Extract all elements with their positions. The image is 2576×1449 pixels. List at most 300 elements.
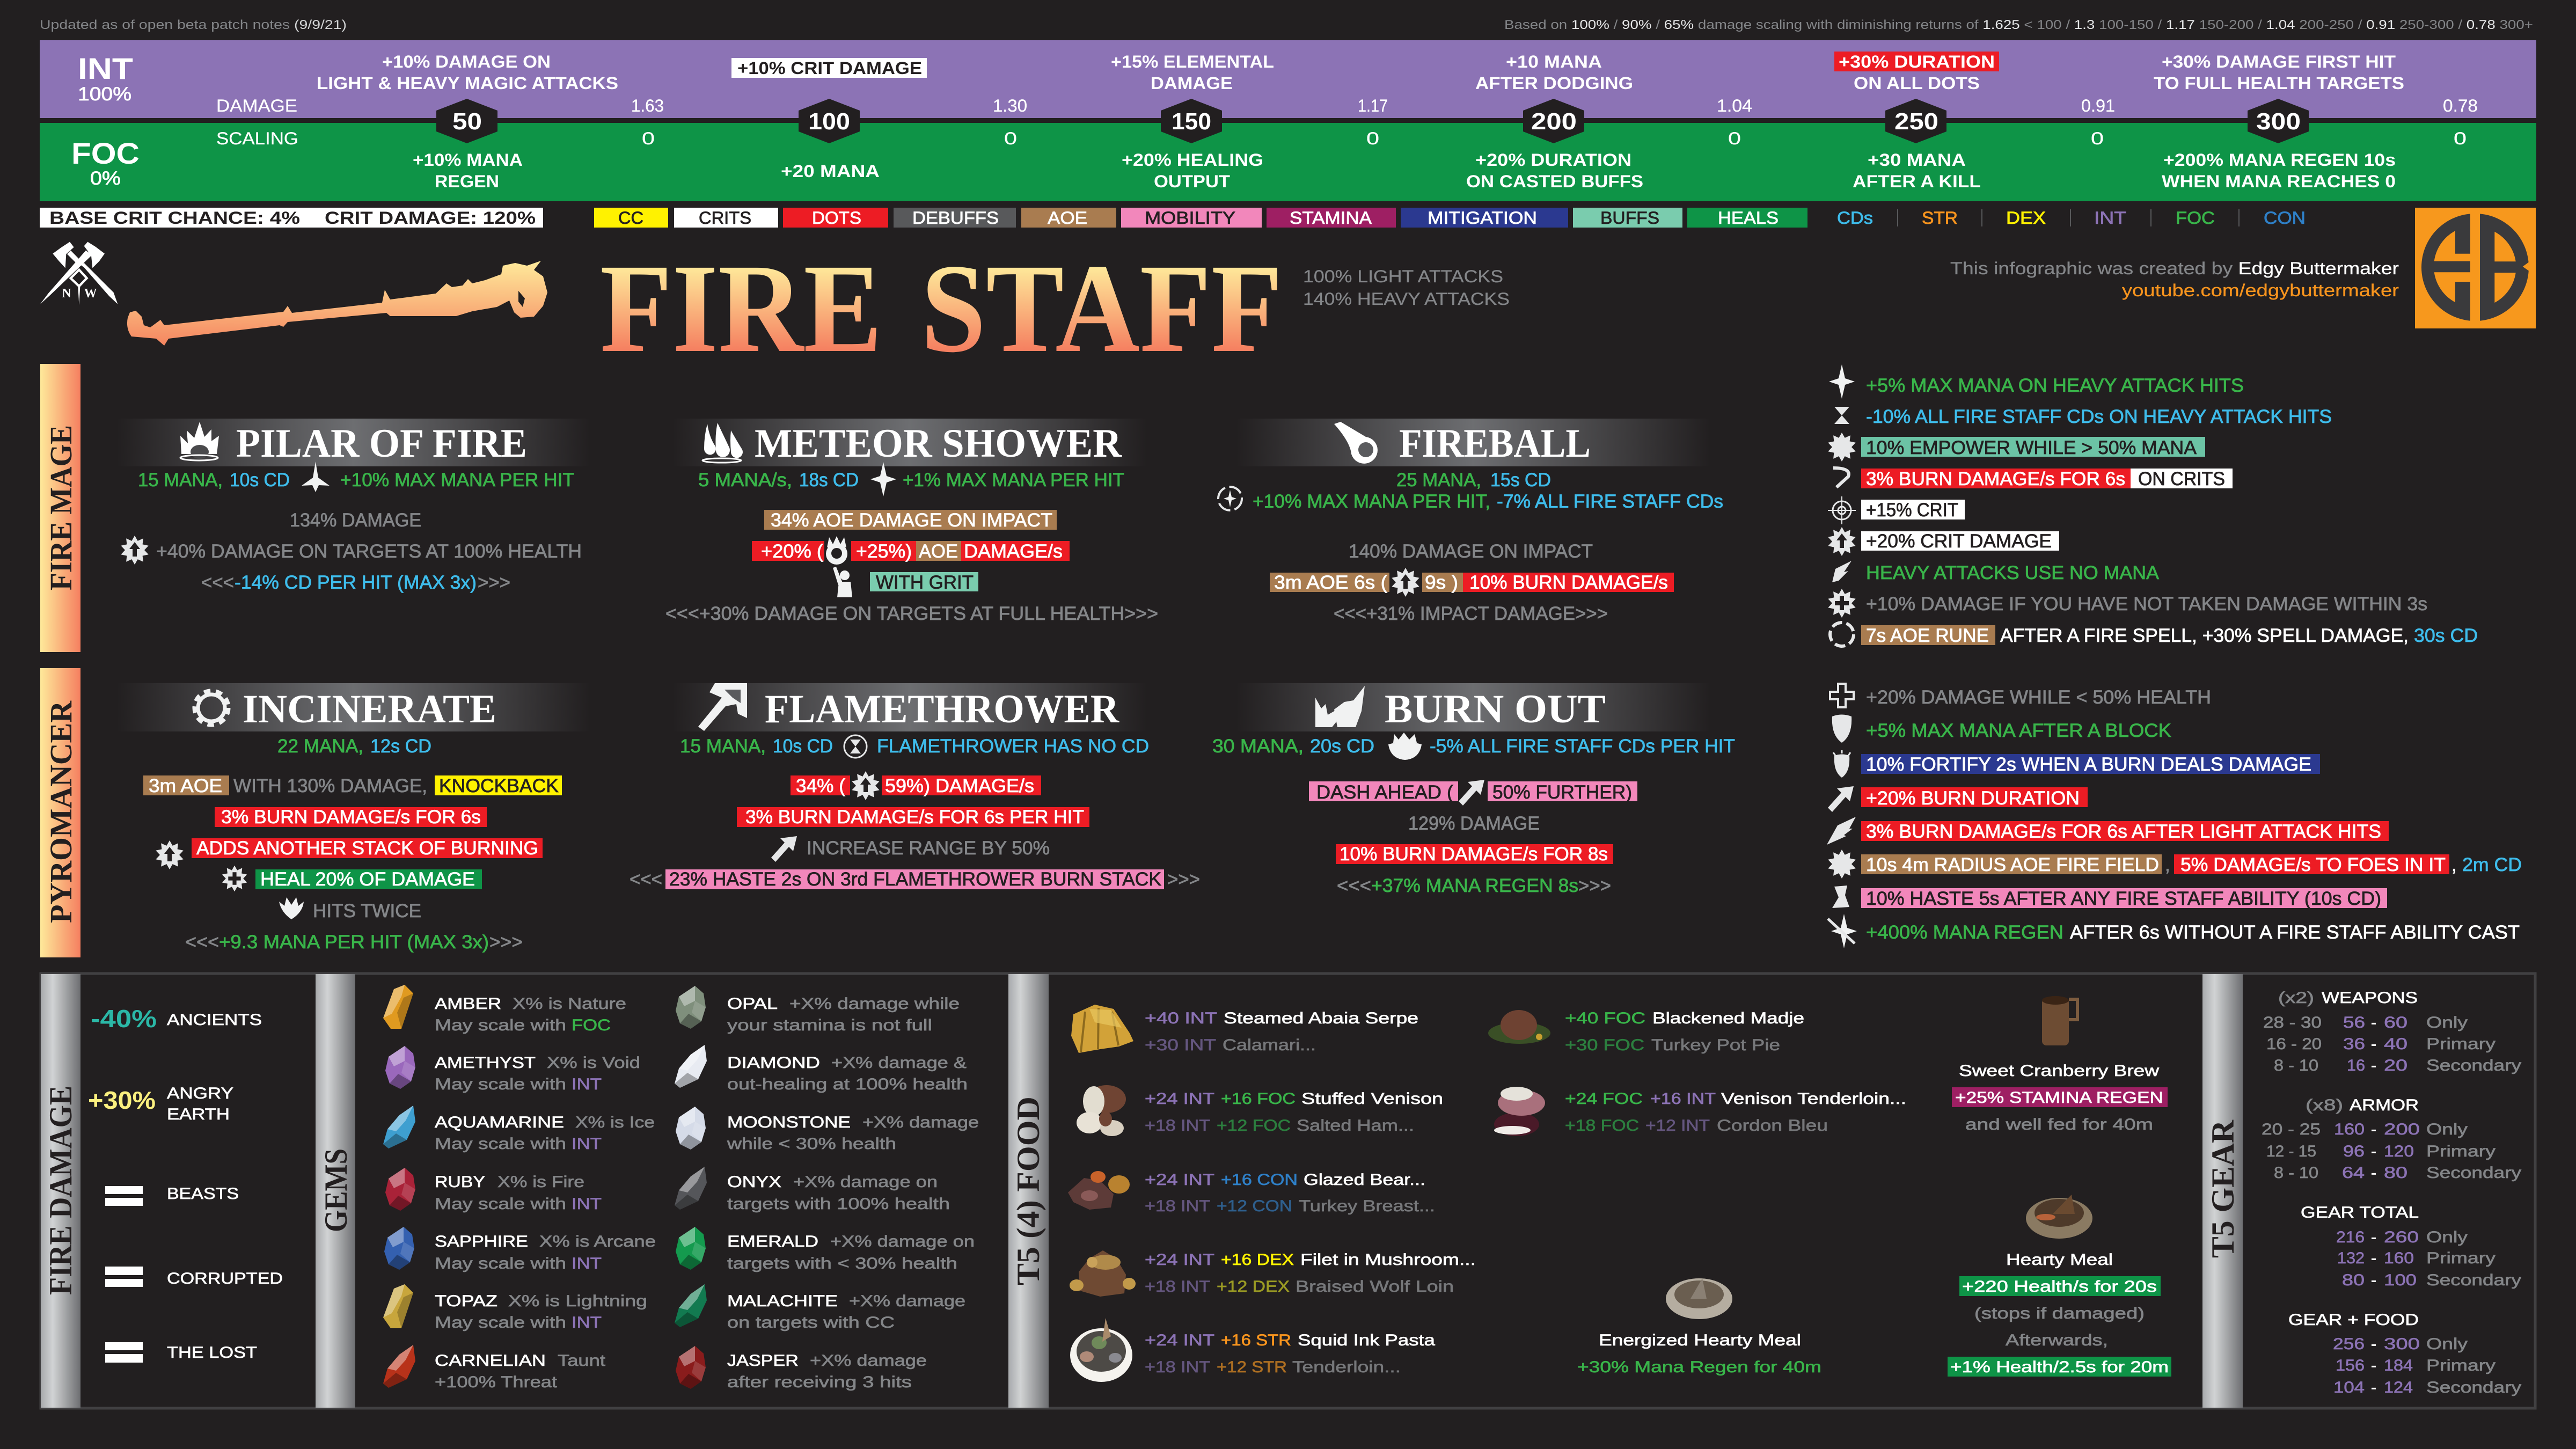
gem: onyx: [675, 1167, 950, 1213]
attack multipliers: 140% HEAVY ATTACKS: [1303, 289, 1510, 309]
passive: damage untouched: +10% DAMAGE IF YOU HAVE NOT TAKEN DAMAGE WITHIN 3s: [1866, 594, 2427, 614]
text block: ADDS ANOTHER STACK OF BURNING: [196, 838, 538, 859]
panel: bottom frame: [41, 974, 2535, 1408]
food: filet in mushroom: +12 DEX: [1217, 1278, 1290, 1296]
text block: 50% FURTHER): [1492, 782, 1632, 803]
FOC band: +200% MANA REGEN 10s: [2163, 150, 2396, 170]
cost row: +10% MAX MANA PER HIT: [340, 470, 574, 491]
food: stuffed venison: +12 FOC: [1217, 1117, 1291, 1135]
gem: aquamarine: [383, 1106, 655, 1153]
cost row: +1% MAX MANA PER HIT: [903, 470, 1124, 491]
row: angry earth: EARTH: [167, 1106, 230, 1123]
colour legend: CC: [618, 208, 643, 228]
threshold hexagon 250: [1885, 99, 1946, 143]
text block: [121, 510, 582, 593]
gem: sapphire: [384, 1227, 656, 1272]
text block: 10% BURN DAMAGE/s: [1469, 572, 1668, 593]
FOC band: +20 MANA: [781, 162, 880, 181]
title: [600, 238, 1283, 379]
panel: pyromancer passives: [1827, 684, 2522, 948]
row: beasts: BEASTS: [167, 1185, 239, 1203]
panel: fire mage tab: [40, 364, 80, 652]
table: armor: 160: [2334, 1121, 2365, 1138]
table: weapons: [2263, 989, 2521, 1074]
panel: pyromancer tab: [40, 668, 80, 957]
text block: +25%): [856, 541, 912, 562]
gem: sapphire: SAPPHIRE: [435, 1233, 528, 1250]
food: hearty meal: +1% Health/2.5s for 20m: [1950, 1358, 2169, 1376]
table: armor: [2262, 1096, 2521, 1182]
text block: [1270, 541, 1674, 624]
heading: fireball: FIREBALL: [1399, 421, 1591, 466]
gem: emerald: EMERALD: [727, 1233, 818, 1250]
gem: ruby: May scale with: [435, 1195, 566, 1213]
INT band: DAMAGE: [1151, 74, 1233, 93]
table: gear plus food: 184: [2384, 1357, 2413, 1374]
INT band: 0.78: [2443, 96, 2478, 115]
FOC band: 0: [642, 129, 655, 148]
food: stuffed venison: +16 FOC: [1221, 1090, 1296, 1108]
table: gear total: Primary: [2426, 1249, 2496, 1267]
heading: incinerate: INCINERATE: [243, 687, 496, 731]
cost row: [680, 735, 1149, 758]
text block: <<<: [630, 869, 662, 890]
panel: gear: [2202, 974, 2521, 1408]
passive: mana regen no cast: AFTER 6s WITHOUT A FIRE STAFF ABILITY CAST: [2070, 922, 2520, 943]
table: armor: 120: [2384, 1143, 2414, 1160]
text block: DASH AHEAD (: [1316, 782, 1453, 803]
gem: ruby: [385, 1168, 602, 1213]
table: gear plus food: Primary: [2426, 1357, 2496, 1374]
heading: flamethrower: FLAMETHROWER: [765, 687, 1119, 731]
passive: empower: 10% EMPOWER WHILE > 50% MANA: [1866, 437, 2197, 458]
gem: ruby: RUBY: [435, 1173, 485, 1191]
text block: 140% DAMAGE ON IMPACT: [1349, 541, 1593, 562]
table: armor: 8 - 10: [2274, 1164, 2318, 1182]
FOC band: SCALING: [216, 129, 298, 148]
gem: moonstone: +X% damage: [862, 1114, 979, 1131]
gem: malachite: [675, 1284, 965, 1331]
food: squid ink pasta: +16 STR: [1221, 1331, 1291, 1349]
table: armor: ARMOR: [2350, 1096, 2419, 1114]
passive: mana regen no cast: [1828, 914, 2520, 948]
table: armor: Only: [2426, 1121, 2468, 1138]
text block: <<<: [185, 932, 219, 953]
passive: fortify: [1833, 750, 2320, 778]
row: beasts: [105, 1185, 239, 1206]
text block: 9s ): [1425, 572, 1458, 593]
row: ancients: -40%: [91, 1005, 157, 1033]
table: gear total: Secondary: [2426, 1271, 2521, 1289]
text block: 34% (: [796, 775, 845, 796]
passive: max mana on heavy: +5% MAX MANA ON HEAVY ATTACK HITS: [1866, 375, 2244, 396]
row: angry earth: +30%: [88, 1086, 156, 1114]
table: weapons: Only: [2426, 1014, 2468, 1031]
passive: aoe rune: 7s AOE RUNE: [1866, 625, 1989, 646]
cost row: 15s CD: [1490, 470, 1551, 491]
table: gear plus food: 104: [2333, 1379, 2365, 1396]
table: gear total: Only: [2426, 1228, 2468, 1246]
cost row: 15 MANA,: [138, 470, 223, 491]
FOC band: 0: [1004, 129, 1017, 148]
icon: EB logo: [2415, 208, 2536, 328]
colour legend: AOE: [1048, 208, 1087, 228]
food: glazed bear: +24 INT: [1145, 1171, 1214, 1189]
table: armor: 20 - 25: [2262, 1121, 2321, 1138]
row: the lost: [105, 1342, 257, 1363]
text block: >>>: [489, 932, 523, 953]
passive: fire field: ,: [2451, 854, 2457, 875]
INT band: 0.91: [2081, 96, 2115, 115]
threshold hexagon 300: [2248, 99, 2309, 143]
icon: New World logo: N: [62, 287, 71, 301]
table: weapons: Primary: [2426, 1035, 2496, 1053]
INT band: +30% DAMAGE FIRST HIT: [2162, 52, 2396, 71]
gem: carnelian: CARNELIAN: [435, 1352, 546, 1370]
food: squid ink pasta: Squid Ink Pasta: [1298, 1331, 1435, 1349]
panel: fire damage: [41, 974, 283, 1408]
passive: low health damage: +20% DAMAGE WHILE < 50% HEALTH: [1866, 687, 2211, 708]
table: gear total: GEAR TOTAL: [2301, 1204, 2419, 1221]
text block: INCREASE RANGE BY 50%: [807, 838, 1050, 859]
tab: gear: T5 GEAR: [2205, 1119, 2241, 1258]
food: sweet cranberry brew: +25% STAMINA REGEN: [1955, 1089, 2163, 1107]
table: armor: Secondary: [2426, 1164, 2521, 1182]
food: steamed abaia serpe: +30 INT: [1145, 1036, 1216, 1054]
icon: meteors: [702, 423, 743, 463]
INT band: [40, 40, 2536, 118]
gem: carnelian: +100% Threat: [435, 1373, 558, 1391]
gem: opal: your stamina is not full: [727, 1016, 932, 1034]
table: gear total: 100: [2384, 1271, 2417, 1289]
panel: pilar of fire: [116, 419, 590, 593]
passive: fire field: 5% DAMAGE/s TO FOES IN IT: [2180, 854, 2446, 875]
table: weapons: -: [2371, 1057, 2376, 1074]
colour legend: CDs: [1837, 208, 1873, 228]
text block: -14% CD PER HIT (MAX 3x): [235, 572, 477, 593]
attack multipliers: [1303, 267, 1510, 309]
food: blackened madje: +30 FOC: [1565, 1036, 1644, 1054]
text block: >>>: [1578, 875, 1611, 896]
gem: opal: +X% damage while: [789, 995, 960, 1013]
panel: fireball: [1218, 419, 1723, 624]
cost row: -5% ALL FIRE STAFF CDs PER HIT: [1430, 736, 1735, 757]
gem: amber: [383, 985, 626, 1034]
food: squid ink pasta: [1070, 1318, 1435, 1382]
colour legend: MOBILITY: [1145, 208, 1235, 228]
text block: HEAL 20% OF DAMAGE: [260, 869, 475, 890]
food: venison tenderloin: +16 INT: [1650, 1090, 1716, 1108]
panel: fire mage tab: FIRE MAGE: [43, 425, 78, 590]
panel: incinerate: [116, 683, 590, 953]
food: filet in mushroom: +16 DEX: [1221, 1251, 1294, 1269]
food: filet in mushroom: +24 INT: [1145, 1251, 1214, 1269]
INT band: 1.63: [631, 96, 664, 115]
passive: mana regen no cast: +400% MANA REGEN: [1866, 922, 2063, 943]
colour legend: STR: [1922, 208, 1958, 228]
threshold hexagon 200: [1523, 99, 1584, 143]
gem: sapphire: May scale with: [435, 1255, 566, 1272]
panel: attribute scaling bands: [40, 40, 2536, 201]
table: gear total: 80: [2342, 1271, 2365, 1289]
gem: diamond: out-healing at 100% health: [727, 1075, 968, 1093]
credit: youtube.com/edgybuttermaker: [2122, 281, 2399, 300]
FOC band: 0: [2091, 129, 2104, 148]
gem: jasper: [676, 1346, 927, 1391]
gem: moonstone: while < 30% health: [727, 1135, 896, 1153]
passive: burn on light: [1827, 817, 2389, 845]
INT band: 1.04: [1717, 96, 1752, 115]
food: stuffed venison: +18 INT: [1145, 1117, 1210, 1135]
colour legend: DEX: [2006, 208, 2046, 228]
tab: fire damage: [41, 974, 80, 1408]
passive: fire field: ,: [2165, 854, 2170, 875]
panel: meteor shower: [665, 419, 1158, 624]
panel: food: [1008, 974, 2171, 1408]
INT band: TO FULL HEALTH TARGETS: [2154, 74, 2404, 93]
row: the lost: THE LOST: [167, 1344, 257, 1362]
INT band: +10 MANA: [1506, 52, 1602, 71]
passive: aoe rune: AFTER A FIRE SPELL, +30% SPELL DAMAGE,: [2000, 625, 2409, 646]
gem: amethyst: AMETHYST: [435, 1054, 536, 1072]
base crit box: CRIT DAMAGE: 120%: [325, 208, 536, 228]
panel: pyromancer tab: PYROMANCER: [43, 700, 78, 923]
text block: DAMAGE/s: [964, 541, 1063, 562]
cost row: 12s CD: [370, 736, 431, 757]
food: venison tenderloin: +12 INT: [1645, 1117, 1710, 1135]
tab: food: [1008, 974, 1049, 1408]
table: weapons: 28 - 30: [2263, 1014, 2322, 1031]
food: steamed abaia serpe: Calamari...: [1223, 1036, 1316, 1054]
gem: ruby: INT: [572, 1195, 602, 1213]
colour legend: DEBUFFS: [912, 208, 999, 228]
colour legend: HEALS: [1718, 208, 1779, 228]
heading: flamethrower: [672, 683, 1147, 731]
text block: [665, 510, 1158, 624]
table: weapons: Secondary: [2426, 1057, 2521, 1074]
food: stuffed venison: Salted Ham...: [1297, 1117, 1414, 1135]
tab: gems: [316, 974, 355, 1408]
table: armor: Primary: [2426, 1143, 2496, 1160]
heading: pilar of fire: [116, 419, 590, 466]
FOC band: +10% MANA: [413, 150, 523, 170]
passive: burn duration: [1828, 786, 2088, 812]
gem: amethyst: X% is Void: [547, 1054, 640, 1072]
text block: 129% DAMAGE: [1408, 813, 1540, 834]
text block: +20% (: [761, 541, 823, 562]
INT band: DAMAGE: [216, 96, 297, 115]
food: squid ink pasta: +24 INT: [1145, 1331, 1214, 1349]
title: FIRE: [600, 238, 882, 379]
colour legend: DOTS: [812, 208, 861, 228]
table: armor: 200: [2384, 1121, 2420, 1138]
table: weapons: -: [2371, 1014, 2376, 1031]
passive: burn on crits: 3% BURN DAMAGE/s FOR 6s: [1866, 469, 2125, 489]
icon: burning boot: [1315, 686, 1365, 727]
table: gear total: [2301, 1204, 2521, 1289]
gem: onyx: targets with 100% health: [727, 1195, 950, 1213]
cost row: [138, 462, 574, 492]
food: glazed bear: [1068, 1171, 1435, 1215]
threshold hexagon 100: [799, 99, 860, 143]
icon: fire staff silhouette: [127, 261, 547, 346]
gem: onyx: ONYX: [727, 1173, 781, 1191]
cost row: 10s CD: [230, 470, 290, 491]
table: gear total: -: [2371, 1249, 2376, 1267]
panel: gems: [316, 974, 979, 1408]
table: gear plus food: [2288, 1311, 2521, 1396]
food: energized hearty meal: +30% Mana Regen for 40m: [1577, 1358, 1821, 1376]
gem: ruby: X% is Fire: [497, 1173, 584, 1191]
heading: meteor shower: METEOR SHOWER: [755, 421, 1122, 466]
FOC band: WHEN MANA REACHES 0: [2162, 172, 2396, 191]
row: angry earth: [88, 1085, 233, 1123]
table: gear plus food: 156: [2336, 1357, 2365, 1374]
food: filet in mushroom: Braised Wolf Loin: [1296, 1278, 1454, 1296]
scaling note: Based on 100% / 90% / 65% damage scaling with diminishing returns of 1.625 < 100 / 1.3 100-150 / 1.17 150-200 / 1.04 200-250 / 0.91 250-300 / 0.78 300+: [1504, 18, 2533, 32]
text block: WITH GRIT: [876, 572, 974, 593]
passive: haste: 10% HASTE 5s AFTER ANY FIRE STAFF ABILITY (10s CD): [1866, 888, 2381, 909]
cost row: [698, 462, 1124, 496]
colour legend: FOC: [2176, 208, 2215, 228]
table: gear plus food: GEAR + FOOD: [2288, 1311, 2419, 1329]
cost row: 5 MANA/s,: [698, 470, 792, 491]
INT band: ON ALL DOTS: [1854, 74, 1980, 93]
food: venison tenderloin: [1494, 1087, 1906, 1136]
gem: malachite: MALACHITE: [727, 1292, 838, 1310]
text block: +37% MANA REGEN 8s: [1371, 875, 1578, 896]
food: blackened madje: Turkey Pot Pie: [1651, 1036, 1780, 1054]
tab: gear: [2202, 974, 2243, 1408]
table: gear plus food: -: [2371, 1379, 2376, 1396]
gem: onyx: +X% damage on: [793, 1173, 938, 1191]
text block: KNOCKBACK: [439, 775, 559, 796]
text block: <<<: [201, 572, 234, 593]
text block: [1309, 780, 1637, 896]
gem: carnelian: [383, 1345, 606, 1391]
table: gear plus food: Only: [2426, 1335, 2468, 1353]
food: sweet cranberry brew: and well fed for 40m: [1965, 1116, 2153, 1133]
gem: amber: FOC: [572, 1016, 611, 1034]
gem: jasper: +X% damage: [810, 1352, 927, 1370]
attack multipliers: 100% LIGHT ATTACKS: [1303, 267, 1503, 286]
passive: fortify: 10% FORTIFY 2s WHEN A BURN DEALS DAMAGE: [1866, 754, 2311, 775]
gem: diamond: [675, 1045, 968, 1093]
icon: New World logo: W: [84, 287, 97, 301]
food: stuffed venison: Stuffed Venison: [1301, 1090, 1443, 1108]
text block: WITH 130% DAMAGE,: [233, 775, 427, 796]
gem: emerald: [676, 1227, 975, 1272]
gem: topaz: [383, 1284, 647, 1331]
gem: amethyst: INT: [572, 1075, 602, 1093]
text block: <<<+31% IMPACT DAMAGE>>>: [1334, 603, 1608, 624]
gem: carnelian: Taunt: [558, 1352, 606, 1370]
icon: fire ring: [195, 691, 228, 724]
row: ancients: [91, 1005, 262, 1033]
text block: 3m AOE: [149, 775, 222, 796]
food: steamed abaia serpe: +40 INT: [1145, 1009, 1217, 1027]
tab: fire damage: FIRE DAMAGE: [43, 1086, 78, 1295]
threshold hexagon 300: 300: [2256, 108, 2301, 135]
icon: flame burst: [180, 422, 219, 460]
INT band: AFTER DODGING: [1475, 74, 1633, 93]
table: armor: 64: [2342, 1164, 2365, 1182]
text block: [630, 771, 1200, 890]
gem: aquamarine: X% is Ice: [575, 1114, 655, 1131]
colour legend: INT: [2094, 208, 2126, 228]
passive: crit: [1828, 496, 1965, 524]
food: glazed bear: +16 CON: [1221, 1171, 1298, 1189]
threshold hexagon 250: 250: [1894, 108, 1938, 135]
text block: 59%) DAMAGE/s: [885, 775, 1034, 796]
gem: moonstone: [676, 1107, 979, 1153]
table: weapons: (x2): [2278, 989, 2314, 1007]
text block: 10% BURN DAMAGE/s FOR 8s: [1340, 844, 1608, 865]
passive: burn duration: +20% BURN DURATION: [1866, 788, 2080, 809]
base crit box: BASE CRIT CHANCE: 4%: [49, 208, 300, 228]
food: hearty meal: Afterwards,: [2006, 1331, 2108, 1349]
food: filet in mushroom: Filet in Mushroom...: [1300, 1251, 1476, 1269]
gem: amber: May scale with: [435, 1016, 566, 1034]
passive: burn on light: 3% BURN DAMAGE/s FOR 6s AFTER LIGHT ATTACK HITS: [1866, 821, 2381, 842]
passive: empower: [1828, 433, 2205, 462]
table: gear plus food: -: [2371, 1335, 2376, 1353]
gem: malachite: on targets with CC: [727, 1314, 895, 1331]
passive: aoe rune: [1830, 623, 2478, 646]
table: weapons: 56: [2343, 1014, 2365, 1031]
colour legend: CRITS: [699, 208, 751, 228]
gem: topaz: TOPAZ: [435, 1292, 497, 1310]
gem: topaz: May scale with: [435, 1314, 566, 1331]
threshold hexagon 150: 150: [1172, 108, 1211, 135]
food: energized hearty meal: [1577, 1278, 1821, 1376]
gem: amber: AMBER: [435, 995, 501, 1013]
colour legend: CON: [2264, 208, 2306, 228]
table: gear total: 216: [2336, 1228, 2365, 1246]
colour legend: BUFFS: [1600, 208, 1659, 228]
FOC band: +20% HEALING: [1122, 150, 1263, 170]
passive: aoe rune: 30s CD: [2414, 625, 2478, 646]
text block: 23% HASTE 2s ON 3rd FLAMETHROWER BURN STACK: [669, 869, 1161, 890]
food: steamed abaia serpe: Steamed Abaia Serpe: [1224, 1009, 1418, 1027]
FOC band: 0: [1728, 129, 1741, 148]
passive: cooldown on heavy: -10% ALL FIRE STAFF CDs ON HEAVY ATTACK HITS: [1866, 406, 2332, 427]
passive: burn on crits: ON CRITS: [2138, 469, 2225, 489]
gem: jasper: after receiving 3 hits: [727, 1373, 912, 1391]
table: armor: -: [2371, 1164, 2376, 1182]
food: filet in mushroom: +18 INT: [1145, 1278, 1210, 1296]
food: blackened madje: [1488, 1009, 1804, 1054]
gem: emerald: targets with < 30% health: [727, 1255, 957, 1272]
passive: crit damage: +20% CRIT DAMAGE: [1866, 531, 2052, 552]
heading: burn out: [1236, 683, 1710, 731]
food: glazed bear: Glazed Bear...: [1304, 1171, 1425, 1189]
table: gear total: 160: [2384, 1249, 2414, 1267]
food: hearty meal: (stops if damaged): [1974, 1305, 2145, 1322]
text block: <<<+30% DAMAGE ON TARGETS AT FULL HEALTH>>>: [665, 603, 1158, 624]
gem: topaz: X% is Lightning: [508, 1292, 647, 1310]
food: blackened madje: +40 FOC: [1565, 1009, 1645, 1027]
cost row: [277, 736, 431, 757]
tab: gems: GEMS: [318, 1148, 354, 1232]
text block: AOE: [919, 541, 958, 562]
table: armor: -: [2371, 1121, 2376, 1138]
row: corrupted: [105, 1267, 283, 1287]
credit: [1950, 259, 2399, 300]
text block: HITS TWICE: [313, 901, 421, 921]
food: glazed bear: +18 INT: [1145, 1197, 1210, 1215]
cost row: -7% ALL FIRE STAFF CDs: [1497, 491, 1723, 512]
